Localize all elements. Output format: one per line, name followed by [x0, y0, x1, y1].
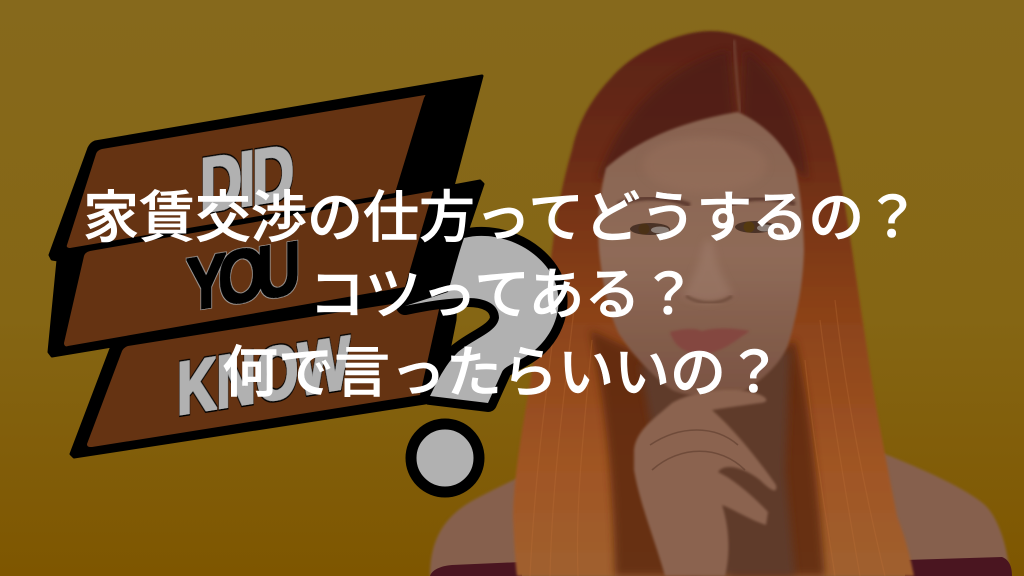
exclamation bar and banners outline: [49, 76, 483, 457]
banner: KNOW: [87, 296, 442, 447]
word: YOU: YOU: [186, 225, 300, 327]
lips: [670, 328, 750, 355]
question mark dot: [411, 424, 479, 492]
photo: thinking woman: [430, 31, 1012, 576]
word: KNOW: KNOW: [177, 319, 350, 431]
nose: [682, 240, 733, 302]
dress: [430, 557, 1012, 576]
neck: [640, 350, 795, 576]
hand: [634, 390, 776, 576]
forehead highlight: [643, 137, 767, 193]
hair back: [513, 31, 914, 576]
eyebrows: [618, 198, 690, 205]
hair strands: [530, 280, 885, 576]
word: DID: DID: [200, 127, 294, 230]
face: [598, 112, 804, 396]
line 2: コツってある？: [309, 263, 697, 326]
dark hair shadow beside neck: [590, 330, 825, 576]
title text: [83, 186, 920, 404]
line 1: 家賃交渉の仕方ってどうするの？: [83, 186, 920, 249]
banner: DID: [67, 95, 425, 248]
hair dark crown: [598, 50, 808, 180]
banner: YOU: [64, 191, 433, 346]
finger creases: [650, 430, 745, 470]
eyes: [618, 198, 795, 235]
shoulders: [430, 452, 1010, 576]
graphic: DID YOU KNOW exclamation badge: [49, 76, 558, 492]
hair part: [734, 40, 740, 112]
line 3: 何で言ったらいいの？: [222, 341, 782, 404]
question mark: [405, 236, 558, 403]
